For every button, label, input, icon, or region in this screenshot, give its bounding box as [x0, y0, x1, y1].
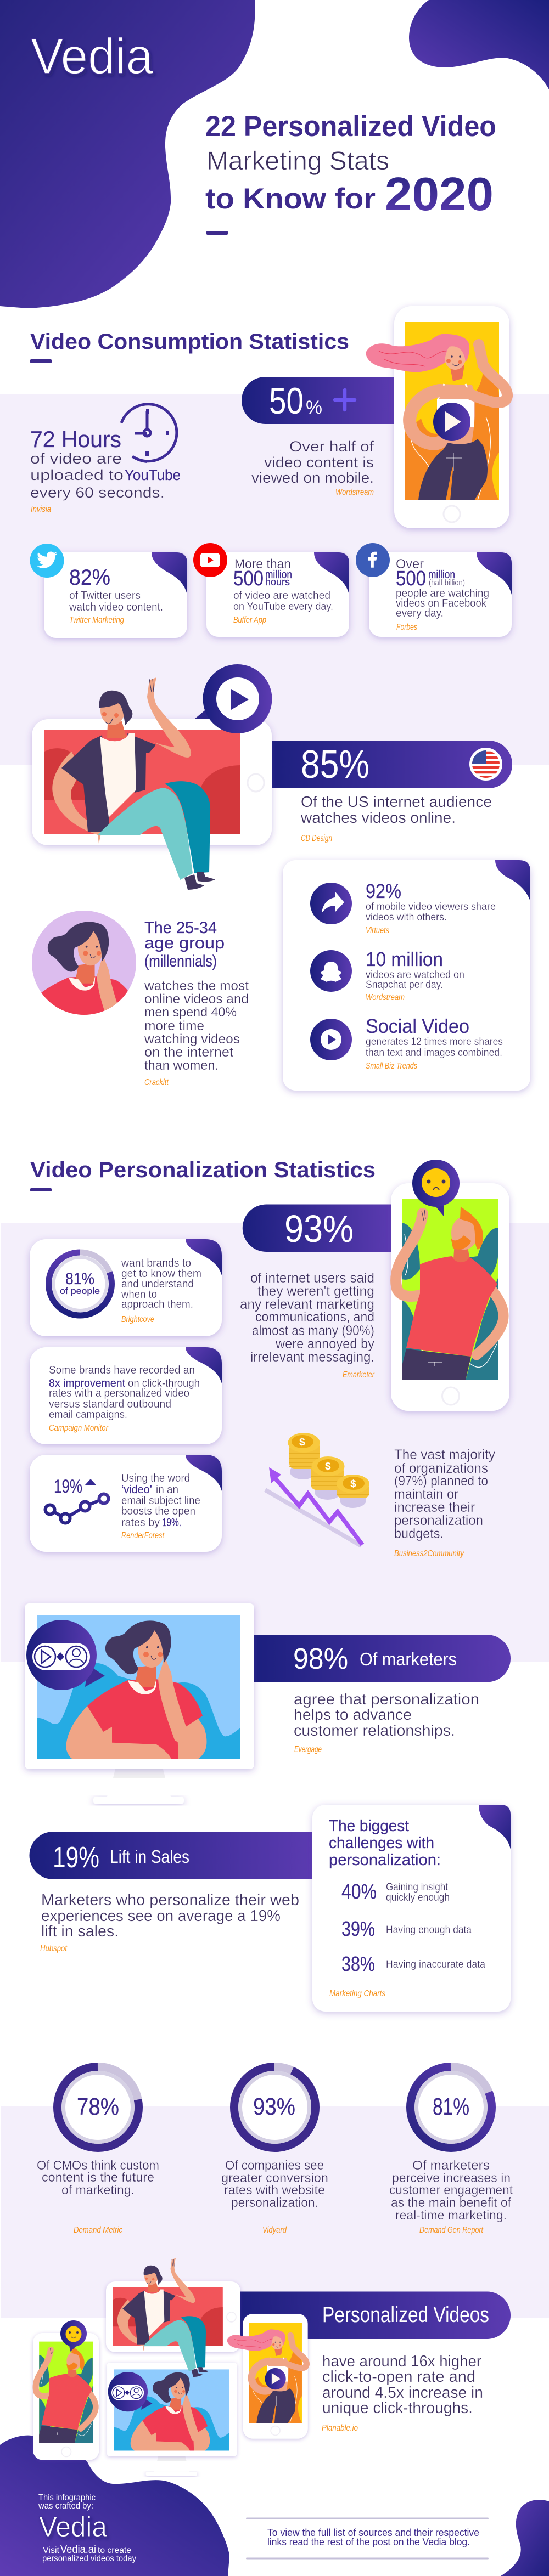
donut stat: 93%: Vidyard: [262, 2225, 287, 2235]
tablet small: man sitting: [106, 2258, 240, 2377]
text: personalized videos: around 4.5x increase in: [322, 2384, 483, 2402]
text: 25-34 age group: online videos and: [144, 992, 249, 1007]
footer credit: Vedia.ai: [60, 2544, 96, 2556]
donut stat: 78%: 78%: [77, 2093, 119, 2120]
donut stat: 93%: [221, 2067, 328, 2235]
donut stat: 93%: 93%: [253, 2093, 295, 2120]
pill: 19% lift in sales: 19%: [53, 1841, 99, 1874]
donut: 81%: [48, 1252, 112, 1315]
card: biggest challenges: 40%: [341, 1880, 377, 1903]
pill: 50%: %: [306, 397, 322, 418]
text: 93% description: they weren't getting: [257, 1284, 374, 1299]
text: 93% description: irrelevant messaging.: [250, 1349, 374, 1365]
card: 8x improvement: 8x improvement: [49, 1377, 125, 1389]
logo: Vedia: Vedia: [31, 29, 154, 84]
icon: facebook: [356, 543, 390, 577]
text: 97% organizations: maintain or: [394, 1487, 458, 1502]
card: 81% of people: Brightcove: [121, 1315, 154, 1324]
text: 93% description: almost as many (90%): [252, 1323, 374, 1338]
donut stat: 81%: customer engagement: [389, 2183, 513, 2197]
donut stat: 81%: 81%: [433, 2093, 469, 2120]
text: personalized videos: Planable.io: [322, 2424, 358, 2433]
text: 72 hours: [30, 426, 181, 514]
card: social sharing stats: than text and images combined.: [366, 1047, 502, 1059]
text: 25-34 age group: Crackitt: [144, 1078, 169, 1087]
bubble small: happy emoji: [60, 2320, 87, 2352]
card: youtube: Buffer App: [233, 615, 266, 625]
text: over half of video: [251, 438, 374, 497]
footer credit: Visit: [43, 2546, 60, 2555]
card: biggest challenges: Marketing Charts: [329, 1989, 385, 1998]
text: marketers lift: [40, 1891, 299, 1953]
card: 81% of people: [30, 1239, 222, 1336]
card: 8x improvement: versus standard outbound: [49, 1398, 171, 1410]
donut stat: 93%: personalization.: [231, 2195, 318, 2210]
phone: woman with pink hair: [366, 306, 509, 528]
footer credit: [38, 2493, 136, 2563]
text: over half of video: video content is: [264, 454, 374, 471]
card: facebook: every day.: [396, 607, 444, 619]
text: agree personalization: [294, 1691, 479, 1754]
icon: US flag: [469, 748, 502, 781]
donut stat: 81%: Of marketers: [412, 2158, 490, 2172]
text: agree personalization: customer relationships.: [294, 1722, 455, 1739]
donut stat: 78%: content is the future: [42, 2170, 154, 2184]
card: 81% of people: of people: [60, 1286, 100, 1296]
donut stat: 78%: Of CMOs think custom: [37, 2158, 159, 2172]
text: over half of video: Wordstream: [335, 488, 374, 497]
card: facebook: people are watching: [396, 587, 489, 600]
card: social sharing stats: Social Video: [366, 1015, 469, 1037]
text: marketers lift: experiences see on average a 19%: [41, 1907, 281, 1925]
footer credit: to create: [98, 2546, 131, 2555]
pill: Personalized Videos: Personalized Videos: [322, 2303, 489, 2327]
card: social sharing stats: videos are watched on: [366, 969, 464, 981]
text: 25-34 age group: than women.: [144, 1058, 219, 1073]
text: 93% description: any relevant marketing: [240, 1297, 374, 1312]
illustration: coins and rising arrow: $: [350, 1478, 356, 1490]
footer credit: personalized videos today: [42, 2554, 136, 2563]
card: 19% open rates: boosts the open: [121, 1505, 195, 1517]
card: biggest challenges: Having inaccurate data: [386, 1959, 485, 1970]
text: marketers lift: Hubspot: [40, 1944, 67, 1953]
text: US audience: CD Design: [301, 834, 332, 843]
text: US audience: [300, 793, 492, 843]
text: 97% organizations: of organizations: [394, 1461, 488, 1476]
card: biggest challenges: 38%: [341, 1953, 375, 1976]
pill: 93%: [243, 1205, 393, 1252]
card: twitter: of Twitter users: [69, 590, 141, 602]
card: 81% of people: want brands to: [121, 1257, 191, 1269]
text: 25-34 age group: more time: [144, 1019, 204, 1033]
text: 25-34 age group: on the internet: [144, 1045, 233, 1060]
card: biggest challenges: Having enough data: [386, 1924, 472, 1936]
icon: line chart up: [45, 1479, 109, 1523]
background band: personalization: [1, 1223, 549, 1662]
card: 81% of people: get to know them: [121, 1268, 201, 1280]
portrait: woman in circle: [32, 911, 136, 1015]
card: 19% open rates: Using the word: [121, 1472, 190, 1484]
illustration: coins and rising arrow: $: [299, 1437, 305, 1448]
note: sources: [246, 2518, 489, 2560]
card: social sharing stats: Virtuets: [366, 926, 389, 935]
title: 2020: [385, 168, 494, 221]
card: biggest challenges: 39%: [341, 1918, 375, 1941]
donut stat: 81%: real-time marketing.: [395, 2208, 507, 2222]
tablet: man sitting: [32, 677, 272, 890]
icon: share: [310, 883, 352, 924]
donut stat: 78%: [37, 2067, 159, 2235]
text: 25-34 age group: age group: [144, 934, 225, 952]
donut stat: 78%: of marketing.: [61, 2183, 135, 2197]
card: 8x improvement: Campaign Monitor: [49, 1423, 109, 1433]
text: 97% organizations: budgets.: [394, 1526, 444, 1541]
pill: 98% of marketers: Of marketers: [360, 1649, 457, 1669]
pill: 93%: 93%: [284, 1207, 354, 1250]
text: personalized videos: click-to-open rate and: [322, 2368, 475, 2386]
text: US audience: watches videos online.: [300, 809, 456, 826]
text: 93% description: of internet users said: [250, 1270, 374, 1286]
card: 19% open rates: ‘video’: [121, 1484, 152, 1496]
heading: Video Personalization Statistics: Video Personalization Statistics: [30, 1158, 376, 1182]
donut stat: 93%: greater conversion: [221, 2171, 328, 2185]
card: 8x improvement: Some brands have recorded an: [49, 1364, 195, 1376]
card: 19% open rates: rates by: [121, 1517, 160, 1529]
pill: 50%: 50: [269, 380, 304, 422]
card: 8x improvement: on click-through: [128, 1377, 200, 1389]
card: social sharing stats: videos with others.: [366, 912, 447, 923]
card: biggest challenges: [312, 1805, 511, 2012]
card: social sharing stats: Wordstream: [366, 993, 405, 1002]
title: to Know for: [205, 183, 376, 215]
blob: bottom right footer: [501, 2500, 549, 2576]
card: youtube: on YouTube every day.: [233, 601, 333, 613]
text: agree personalization: Evergage: [294, 1745, 322, 1754]
card: 8x improvement: email campaigns.: [49, 1409, 127, 1421]
card: 19% open rates: in an: [156, 1484, 178, 1496]
text: 25-34 age group: [144, 919, 249, 1087]
card: social sharing stats: 92%: [366, 880, 401, 902]
icon: play: [310, 1019, 352, 1060]
text: 25-34 age group: (millennials): [144, 952, 217, 970]
card: biggest challenges: quickly enough: [386, 1892, 450, 1903]
text: 25-34 age group: The 25-34: [144, 919, 217, 937]
card: facebook: 500: [396, 567, 426, 590]
pill: 98% of marketers: 98%: [293, 1642, 348, 1675]
title: Marketing Stats: [206, 146, 389, 175]
card: social sharing stats: generates 12 times more shares: [366, 1036, 503, 1048]
card: twitter: [30, 544, 187, 638]
donut stat: 81%: as the main benefit of: [391, 2195, 512, 2210]
text: 97% organizations: [394, 1447, 495, 1558]
heading: Video Consumption Statistics: Video Consumption Statistics: [30, 330, 349, 354]
card: 81% of people: when to: [121, 1289, 157, 1301]
donut stat: 93%: rates with website: [224, 2183, 325, 2197]
title: 22 Personalized Video: [205, 110, 496, 143]
card: youtube: 500: [233, 567, 264, 590]
text: 72 hours: 72 Hours: [30, 426, 121, 452]
illustration: coins and rising arrow: [265, 1433, 369, 1546]
bubble: sad emoji: [412, 1160, 460, 1216]
icon: snapchat: [310, 950, 352, 992]
text: 72 hours: YouTube: [125, 467, 181, 483]
donut stat: 93%: Of companies see: [225, 2158, 324, 2172]
bubble: play: [194, 664, 272, 733]
text: personalized videos: have around 16x higher: [322, 2353, 481, 2370]
text: 72 hours: Invisia: [31, 505, 51, 514]
card: 81% of people: and understand: [121, 1278, 194, 1290]
card: facebook: Over: [396, 557, 424, 572]
blob: bottom left footer: [0, 2436, 229, 2576]
background band: consumption: [0, 394, 549, 765]
card: biggest challenges: challenges with: [329, 1834, 434, 1852]
donut stat: 81%: Demand Gen Report: [419, 2225, 483, 2235]
phone small: man with beard: [33, 2333, 99, 2460]
card: 19% open rates: email subject line: [121, 1495, 200, 1507]
card: youtube: million: [265, 569, 292, 581]
card: biggest challenges: The biggest: [329, 1817, 409, 1835]
card: 8x improvement: rates with a personalized video: [49, 1387, 189, 1399]
card: 8x improvement: [30, 1347, 222, 1444]
note: sources: To view the full list of sources and their respective: [267, 2527, 479, 2538]
card: facebook: million: [428, 569, 455, 581]
text: 97% organizations: increase their: [394, 1500, 475, 1515]
blob: top left header: [0, 0, 255, 308]
bubble: video to person: [26, 1620, 105, 1690]
text: US audience: Of the US internet audience: [301, 793, 492, 810]
card: social sharing stats: Small Biz Trends: [366, 1061, 417, 1071]
text: 25-34 age group: men spend 40%: [144, 1005, 237, 1020]
donut stat: 81%: perceive increases in: [392, 2171, 511, 2185]
text: 25-34 age group: watches the most: [144, 979, 249, 993]
heading: Video Personalization Statistics: [30, 1158, 376, 1191]
illustration: coins and rising arrow: $: [325, 1461, 331, 1472]
text: marketers lift: lift in sales.: [41, 1923, 119, 1940]
note: sources: links read the rest of the post on the Vedia blog.: [267, 2537, 470, 2547]
text: agree personalization: agree that personalization: [294, 1691, 479, 1708]
pill: 98% of marketers: [253, 1635, 511, 1682]
icon: youtube: [193, 543, 227, 577]
icon: clock: [121, 404, 177, 462]
card: biggest challenges: Gaining insight: [386, 1882, 449, 1893]
text: personalized videos: unique click-throughs.: [322, 2399, 473, 2417]
card: youtube: More than: [234, 557, 291, 572]
text: 93% description: communications, and: [255, 1309, 374, 1325]
card: 19% open rates: [30, 1455, 222, 1552]
text: 72 hours: uploaded to: [30, 467, 124, 483]
card: facebook: Forbes: [396, 623, 417, 632]
text: 25-34 age group: watching videos: [144, 1032, 240, 1047]
text: 72 hours: every 60 seconds.: [30, 484, 165, 501]
card: 19% open rates: RenderForest: [121, 1531, 164, 1540]
monitor: woman with speech bubble: [25, 1603, 254, 1804]
text: 97% organizations: Business2Community: [394, 1549, 464, 1558]
pill: 85%: [269, 741, 512, 788]
phone: man with beard: [391, 1183, 509, 1411]
pill: 50%: [242, 377, 395, 424]
card: social sharing stats: of mobile video viewers share: [366, 901, 496, 913]
text: over half of video: Over half of: [289, 438, 374, 455]
text: 93% description: [240, 1270, 375, 1380]
card: 81% of people: 81%: [65, 1270, 94, 1288]
text: 93% description: were annoyed by: [275, 1336, 374, 1352]
card: social sharing stats: 10 million: [366, 948, 443, 970]
card: facebook: videos on Facebook: [396, 597, 487, 609]
card: facebook: [356, 543, 512, 637]
card: social sharing stats: [283, 860, 530, 1091]
card: youtube: hours: [265, 577, 290, 587]
blob: top right: [409, 0, 549, 89]
donut stat: 78%: Demand Metric: [74, 2225, 122, 2235]
pill: 19% lift in sales: [30, 1832, 316, 1879]
text: 97% organizations: The vast majority: [394, 1447, 495, 1462]
text: over half of video: viewed on mobile.: [251, 470, 374, 486]
donut stat: 81%: [389, 2067, 513, 2235]
card: 19% open rates: 19%: [54, 1476, 82, 1497]
pill: Personalized Videos: [236, 2292, 511, 2339]
footer credit: Vedia: [39, 2511, 107, 2543]
monitor small: woman: [107, 2363, 237, 2476]
text: 93% description: Emarketer: [343, 1370, 375, 1380]
card: facebook: (half billion): [429, 578, 465, 587]
card: 81% of people: approach them.: [121, 1298, 193, 1310]
card: twitter: watch video content.: [69, 601, 163, 613]
card: biggest challenges: personalization:: [329, 1851, 441, 1869]
pill: 85%: 85%: [301, 743, 369, 787]
pill: 19% lift in sales: Lift in Sales: [110, 1846, 189, 1867]
background band: rings: [1, 2106, 549, 2318]
text: 72 hours: of video are: [30, 450, 122, 467]
phone small: woman with pink hair: [227, 2314, 308, 2439]
title: [205, 110, 496, 235]
text: 97% organizations: (97%) planned to: [394, 1473, 488, 1489]
text: marketers lift: Marketers who personalize their web: [41, 1891, 299, 1909]
text: agree personalization: helps to advance: [294, 1706, 412, 1723]
card: youtube: [193, 543, 349, 637]
card: 19% open rates: 19%.: [162, 1517, 181, 1529]
footer credit: was crafted by:: [38, 2501, 93, 2511]
text: personalized videos: [322, 2353, 483, 2433]
icon: twitter: [30, 544, 64, 578]
card: social sharing stats: Snapchat per day.: [366, 979, 443, 991]
card: twitter: Twitter Marketing: [69, 615, 124, 625]
card: youtube: of video are watched: [233, 590, 330, 602]
footer credit: This infographic: [38, 2493, 96, 2502]
card: twitter: 82%: [69, 566, 110, 590]
text: 97% organizations: personalization: [394, 1513, 483, 1528]
